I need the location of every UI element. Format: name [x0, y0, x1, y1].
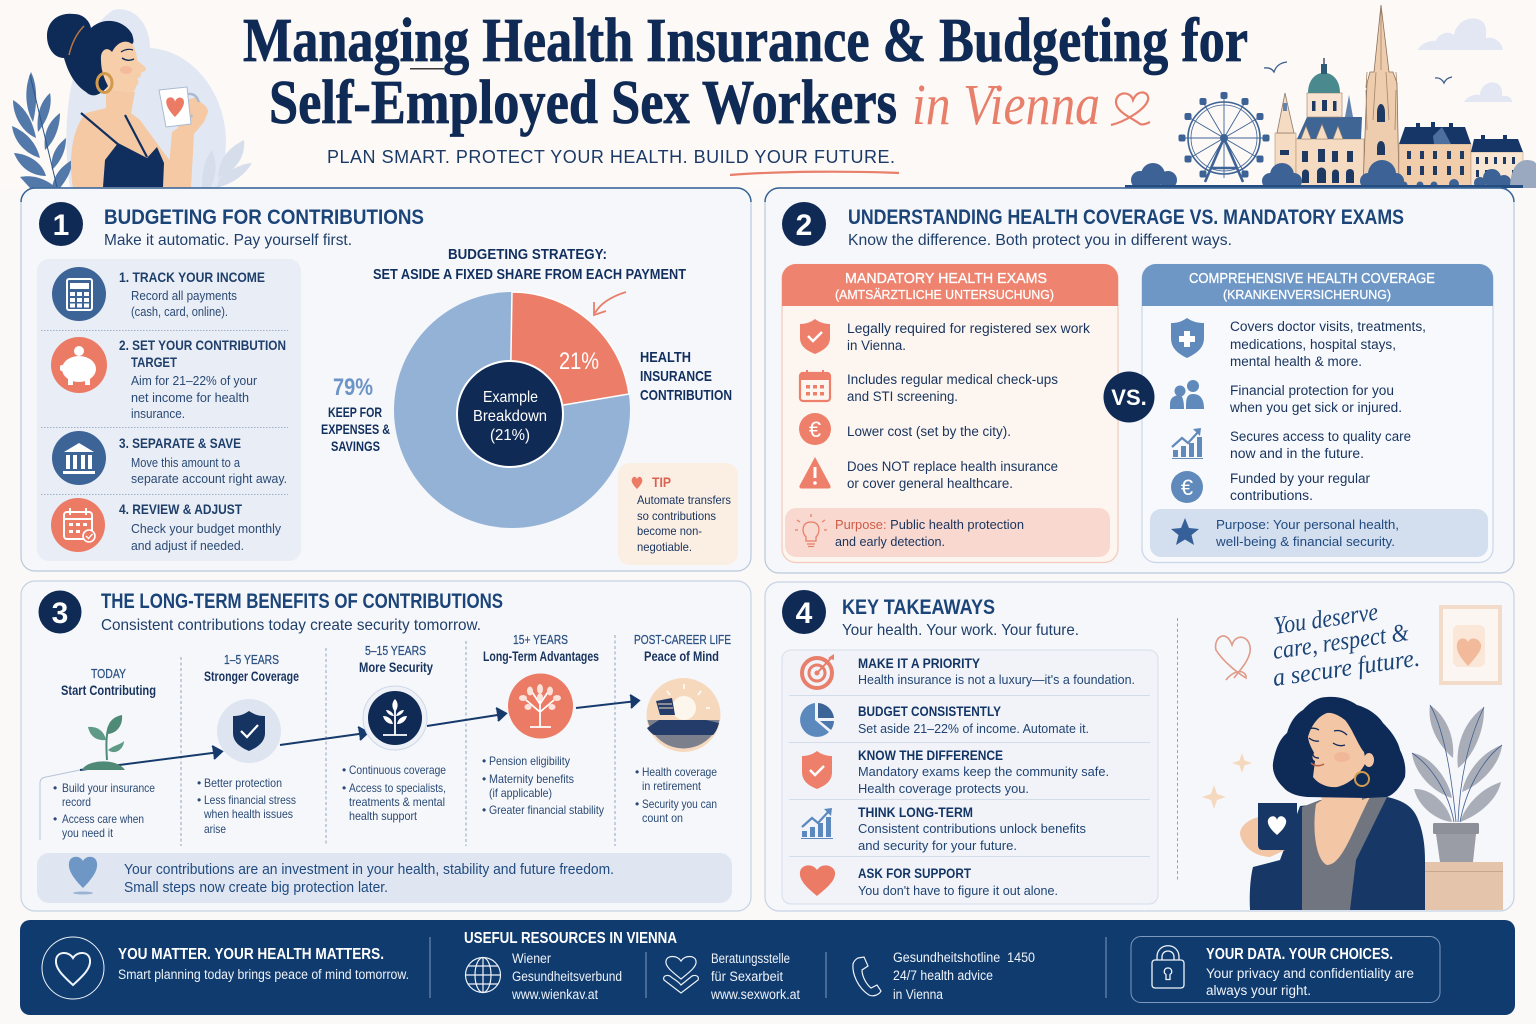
- step 1: track income: Record all payments: [131, 288, 237, 303]
- label: 79 percent: EXPENSES &: [321, 421, 390, 437]
- panel 1: budgeting: [21, 188, 751, 571]
- card: comprehensive health coverage: Secures access to quality care: [1230, 429, 1411, 444]
- number badge 3: 3: [52, 597, 68, 630]
- cardigan: [1250, 797, 1425, 910]
- torso: [71, 88, 191, 188]
- column: today: Build your insurance: [62, 781, 155, 795]
- potted plant and cabinet: [1412, 705, 1503, 910]
- skin neckline: [1314, 780, 1370, 865]
- card: mandatory health exams: in Vienna.: [847, 338, 906, 353]
- step 2: contribution target: insurance.: [131, 406, 185, 421]
- column: 5-15 years: Access to specialists,: [349, 781, 446, 795]
- icon: heart outline: [1216, 636, 1250, 680]
- sparkles: [1202, 753, 1252, 809]
- icon: shield: [217, 699, 281, 763]
- resource: health hotline: in Vienna: [893, 987, 943, 1002]
- resource: wiener gesundheitsverbund: Wiener: [512, 951, 551, 966]
- column: today: •: [53, 781, 57, 795]
- label: 79 percent: KEEP FOR: [328, 404, 382, 420]
- budgeting strategy heading: [373, 246, 686, 283]
- card: comprehensive health coverage: COMPREHENSIVE HEALTH COVERAGE: [1189, 270, 1435, 287]
- item: budget: BUDGET CONSISTENTLY: [858, 704, 1001, 719]
- panel 3: long-term benefits: [21, 581, 751, 911]
- script quote: [1271, 599, 1421, 692]
- icon: seedling: [82, 715, 125, 770]
- features: [1308, 728, 1347, 758]
- column: 5-15 years: •: [342, 763, 346, 777]
- takeaways list: [782, 650, 1158, 904]
- pie chart: (21%): [490, 427, 530, 444]
- number badge 1: [39, 202, 83, 246]
- label: health insurance contribution: INSURANCE: [640, 368, 712, 385]
- tip callout: negotiable.: [637, 540, 692, 554]
- column: 1-5 years: [197, 652, 299, 836]
- gray top: [1302, 796, 1387, 910]
- your data box: always your right.: [1206, 983, 1311, 998]
- subheading: Know the difference. Both protect you in different ways.: [848, 232, 1232, 249]
- column: post-career life: Security you can: [642, 797, 717, 811]
- subtitle: PLAN SMART. PROTECT YOUR HEALTH. BUILD YOUR FUTURE.: [327, 147, 895, 167]
- column: today: •: [53, 812, 57, 826]
- investment banner: Your contributions are an investment in your health, stability and future freedom.: [124, 861, 614, 878]
- item: long term: [801, 805, 1086, 853]
- step 2: contribution target: 2. SET YOUR CONTRIBUTION: [119, 337, 286, 353]
- column: 1-5 years: Better protection: [204, 776, 282, 790]
- script quote: You deserve: [1272, 599, 1380, 640]
- timeline arrows: [40, 695, 639, 840]
- icon: sprout badge: [363, 686, 427, 750]
- icon: people: [1170, 380, 1204, 409]
- arm and hand: [167, 97, 208, 188]
- column: 5-15 years: Continuous coverage: [349, 763, 446, 777]
- column: 15+ years: Greater financial stability: [489, 803, 604, 817]
- step 1: track income: (cash, card, online).: [131, 304, 228, 319]
- heading: BUDGETING FOR CONTRIBUTIONS: [104, 205, 424, 229]
- step 3: separate and save: separate account right away.: [131, 471, 287, 486]
- resource: health hotline: [853, 950, 1035, 1002]
- hair: [47, 14, 134, 95]
- column: 15+ years: Maternity benefits: [489, 772, 574, 786]
- column: 1-5 years: •: [197, 776, 201, 790]
- icon: heart in circle: [42, 937, 104, 999]
- pie chart: 21%: [559, 348, 599, 375]
- label: 79 percent: [321, 374, 390, 454]
- your data box: YOUR DATA. YOUR CHOICES.: [1206, 946, 1393, 963]
- column: post-career life: count on: [642, 811, 683, 825]
- column: 5-15 years: •: [342, 781, 346, 795]
- icon: padlock: [1152, 946, 1184, 988]
- card: mandatory health exams: [782, 264, 1118, 562]
- column: today: Start Contributing: [61, 683, 156, 698]
- column: 5-15 years: [342, 643, 446, 823]
- label: health insurance contribution: [640, 349, 732, 404]
- resource: wiener gesundheitsverbund: Gesundheitsverbund: [512, 969, 622, 984]
- hall building: [1275, 133, 1296, 187]
- resource: beratungsstelle: für Sexarbeit: [711, 969, 783, 984]
- column: 1-5 years: 1–5 YEARS: [224, 652, 279, 667]
- column: 1-5 years: Stronger Coverage: [204, 669, 299, 684]
- item: budget: Set aside 21–22% of income. Automate it.: [858, 721, 1089, 736]
- column: 15+ years: •: [482, 754, 486, 768]
- mug: [1258, 803, 1297, 850]
- townhouses: [1399, 144, 1471, 187]
- column: today: record: [62, 795, 91, 809]
- script quote: a secure future.: [1271, 645, 1421, 692]
- panel 4: key takeaways: [765, 582, 1514, 911]
- budgeting strategy heading: BUDGETING STRATEGY:: [448, 246, 607, 263]
- icon: sunset bench: [646, 678, 720, 752]
- card: mandatory health exams: or cover general healthcare.: [847, 476, 1013, 491]
- step 2: contribution target: [51, 337, 286, 421]
- icon: shield plus: [1171, 318, 1204, 358]
- resource: beratungsstelle: [664, 951, 800, 1002]
- hand: [1240, 817, 1285, 857]
- column: 15+ years: Pension eligibility: [489, 754, 570, 768]
- your data box: [1131, 936, 1440, 1002]
- illustration: woman with coffee: [1240, 697, 1425, 910]
- card: mandatory health exams: MANDATORY HEALTH EXAMS: [845, 270, 1047, 287]
- card: comprehensive health coverage: medications, hospital stays,: [1230, 337, 1396, 352]
- column: 1-5 years: •: [197, 793, 201, 807]
- column: 15+ years: (if applicable): [489, 786, 552, 800]
- column: 5-15 years: More Security: [359, 660, 433, 675]
- icon: euro: €: [1181, 475, 1193, 500]
- number badge 2: [782, 202, 826, 246]
- purpose box: Purpose: Public health protection: [835, 517, 1024, 532]
- steps card: [37, 259, 301, 561]
- title: Self-Employed Sex Workers: [269, 69, 897, 137]
- column: today: Access care when: [62, 812, 144, 826]
- resource: wiener gesundheitsverbund: [466, 951, 622, 1002]
- purpose box: Purpose: Your personal health,: [1216, 517, 1399, 532]
- pie chart: Breakdown: [473, 408, 547, 425]
- column: 15+ years: [482, 632, 604, 817]
- heading: THE LONG-TERM BENEFITS OF CONTRIBUTIONS: [101, 589, 503, 613]
- icon: euro: [799, 413, 831, 445]
- tip callout: become non-: [637, 524, 702, 538]
- label: health insurance contribution: HEALTH: [640, 349, 691, 366]
- you matter message: YOU MATTER. YOUR HEALTH MATTERS.: [118, 946, 384, 963]
- resource: beratungsstelle: www.sexwork.at: [710, 987, 800, 1002]
- subheading: Make it automatic. Pay yourself first.: [104, 232, 352, 249]
- card: comprehensive health coverage: [1142, 264, 1493, 562]
- framed heart picture: [1441, 607, 1500, 683]
- item: priority: [802, 654, 1135, 688]
- subheading: Your health. Your work. Your future.: [842, 622, 1079, 639]
- script: in Vienna: in Vienna: [912, 72, 1100, 137]
- item: support: You don't have to figure it out alone.: [858, 883, 1058, 898]
- arrow to wedge: [594, 292, 626, 315]
- useful resources heading: USEFUL RESOURCES IN VIENNA: [464, 930, 677, 947]
- script quote: care, respect &: [1271, 619, 1411, 665]
- budgeting strategy heading: SET ASIDE A FIXED SHARE FROM EACH PAYMENT: [373, 266, 686, 283]
- step 3: separate and save: [52, 431, 287, 486]
- step 2: contribution target: net income for health: [131, 390, 249, 405]
- icon: growth chart: [1172, 428, 1203, 459]
- heading: UNDERSTANDING HEALTH COVERAGE VS. MANDATORY EXAMS: [848, 205, 1404, 229]
- card: mandatory health exams: Lower cost (set by the city).: [847, 424, 1011, 439]
- trees: [1131, 160, 1511, 189]
- icon: warning: [800, 458, 830, 488]
- card: mandatory health exams: (AMTSÄRZTLICHE UNTERSUCHUNG): [835, 287, 1054, 302]
- VS badge: VS.: [1111, 385, 1147, 410]
- purpose box: [1150, 509, 1488, 557]
- ferris wheel: [1184, 98, 1264, 182]
- tip callout: so contributions: [637, 509, 716, 523]
- number badge 1: 1: [53, 209, 69, 242]
- item: budget: [800, 703, 1089, 737]
- item: priority: MAKE IT A PRIORITY: [858, 656, 980, 671]
- item: long term: and security for your future.: [858, 838, 1017, 853]
- step 4: review and adjust: 4. REVIEW & ADJUST: [119, 501, 242, 517]
- purpose box: well-being & financial security.: [1215, 534, 1395, 549]
- number badge 4: 4: [796, 597, 813, 630]
- card: mandatory health exams: Legally required for registered sex work: [847, 321, 1090, 336]
- item: difference: Health coverage protects you.: [858, 781, 1029, 796]
- column: post-career life: •: [635, 765, 639, 779]
- VS badge: [1104, 372, 1154, 422]
- item: difference: [802, 748, 1109, 796]
- label: 79 percent: SAVINGS: [331, 438, 380, 454]
- cathedral: [1363, 5, 1399, 187]
- card: comprehensive health coverage: when you get sick or injured.: [1229, 400, 1402, 415]
- your data box: Your privacy and confidentiality are: [1206, 966, 1414, 981]
- card: comprehensive health coverage: contributions.: [1230, 488, 1313, 503]
- card: comprehensive health coverage: mental health & more.: [1230, 354, 1362, 369]
- heading: KEY TAKEAWAYS: [842, 595, 995, 619]
- pie chart: Example: [483, 389, 538, 406]
- column: 15+ years: •: [482, 803, 486, 817]
- column: 15+ years: Long-Term Advantages: [483, 649, 599, 664]
- column: 5-15 years: 5–15 YEARS: [365, 643, 426, 658]
- item: priority: Health insurance is not a luxury—it's a foundation.: [858, 672, 1135, 687]
- step 2: contribution target: Aim for 21–22% of your: [131, 373, 258, 388]
- subheading: Consistent contributions today create security tomorrow.: [101, 617, 481, 634]
- column: post-career life: [634, 632, 731, 825]
- card: comprehensive health coverage: Financial protection for you: [1230, 383, 1394, 398]
- column: post-career life: Health coverage: [642, 765, 717, 779]
- icon: tree: [508, 674, 573, 738]
- step 4: review and adjust: and adjust if needed.: [131, 538, 244, 553]
- column: post-career life: in retirement: [642, 779, 702, 793]
- icon: calendar: [800, 370, 830, 401]
- card: mandatory health exams: and STI screening.: [847, 389, 958, 404]
- pie chart: [394, 292, 630, 528]
- item: difference: Mandatory exams keep the community safe.: [858, 764, 1109, 779]
- resource: beratungsstelle: Beratungsstelle: [711, 951, 790, 966]
- ear: [1364, 753, 1374, 767]
- item: difference: KNOW THE DIFFERENCE: [858, 748, 1003, 763]
- you matter message: [118, 946, 409, 982]
- label: 79 percent: 79%: [333, 374, 373, 401]
- panel 2: coverage vs exams: [765, 188, 1514, 573]
- column: 1-5 years: arise: [204, 822, 226, 836]
- step 3: separate and save: 3. SEPARATE & SAVE: [119, 435, 241, 451]
- face: [96, 35, 146, 93]
- icon: euro: [1171, 471, 1203, 503]
- investment banner: [37, 853, 732, 903]
- resource: wiener gesundheitsverbund: www.wienkav.at: [511, 987, 598, 1002]
- column: 15+ years: 15+ YEARS: [513, 632, 568, 647]
- column: today: you need it: [62, 826, 114, 840]
- icon: euro: €: [809, 417, 821, 442]
- column: 15+ years: •: [482, 772, 486, 786]
- header banner: [0, 0, 1536, 190]
- tip callout: Automate transfers: [637, 493, 731, 507]
- number badge 3: [38, 590, 82, 634]
- you matter message: Smart planning today brings peace of mind tomorrow.: [118, 967, 409, 982]
- item: long term: THINK LONG-TERM: [858, 805, 973, 820]
- illustration: woman with mug: [12, 9, 252, 188]
- investment banner: Small steps now create big protection later.: [124, 879, 388, 896]
- title: Managing Health Insurance & Budgeting for: [243, 7, 1248, 75]
- footer bar: [20, 920, 1515, 1015]
- item: long term: Consistent contributions unlock benefits: [858, 821, 1086, 836]
- step 4: review and adjust: [51, 498, 281, 553]
- title: [243, 7, 1248, 137]
- step 3: separate and save: Move this amount to a: [131, 455, 241, 470]
- purpose box: and early detection.: [835, 534, 945, 549]
- column: post-career life: •: [635, 797, 639, 811]
- resource: health hotline: Gesundheitshotline 1450: [893, 950, 1035, 965]
- column: 1-5 years: Less financial stress: [204, 793, 296, 807]
- column: 5-15 years: treatments & mental: [349, 795, 445, 809]
- step 2: contribution target: TARGET: [131, 354, 177, 370]
- step 1: track income: 1. TRACK YOUR INCOME: [119, 269, 265, 285]
- card: mandatory health exams: Does NOT replace health insurance: [847, 459, 1058, 474]
- number badge 4: [782, 590, 826, 634]
- step 4: review and adjust: Check your budget monthly: [131, 521, 281, 536]
- step 1: track income: [52, 267, 265, 321]
- column: post-career life: Peace of Mind: [644, 649, 719, 664]
- card: comprehensive health coverage: (KRANKENVERSICHERUNG): [1223, 287, 1391, 302]
- resource: health hotline: 24/7 health advice: [893, 968, 993, 983]
- column: 5-15 years: health support: [349, 809, 418, 823]
- card: comprehensive health coverage: Funded by your regular: [1230, 471, 1370, 486]
- item: support: ASK FOR SUPPORT: [858, 866, 972, 881]
- hair: [1273, 697, 1405, 798]
- column: today: TODAY: [91, 666, 126, 681]
- tip callout: TIP: [652, 474, 671, 490]
- icon: shield check: [800, 319, 830, 354]
- column: 1-5 years: when health issues: [203, 807, 293, 821]
- label: health insurance contribution: CONTRIBUTION: [640, 387, 732, 404]
- card: comprehensive health coverage: now and in the future.: [1230, 446, 1364, 461]
- column: today: [53, 666, 156, 840]
- card: mandatory health exams: Includes regular medical check-ups: [847, 372, 1058, 387]
- illustration: Vienna skyline: [1125, 5, 1536, 189]
- bra: [81, 113, 147, 157]
- item: support: [800, 865, 1058, 898]
- column: post-career life: POST-CAREER LIFE: [634, 632, 731, 647]
- card: comprehensive health coverage: Covers doctor visits, treatments,: [1230, 319, 1426, 334]
- face: [1308, 713, 1366, 787]
- purpose box: [785, 508, 1110, 557]
- number badge 2: 2: [796, 209, 812, 242]
- tip callout: [618, 463, 738, 565]
